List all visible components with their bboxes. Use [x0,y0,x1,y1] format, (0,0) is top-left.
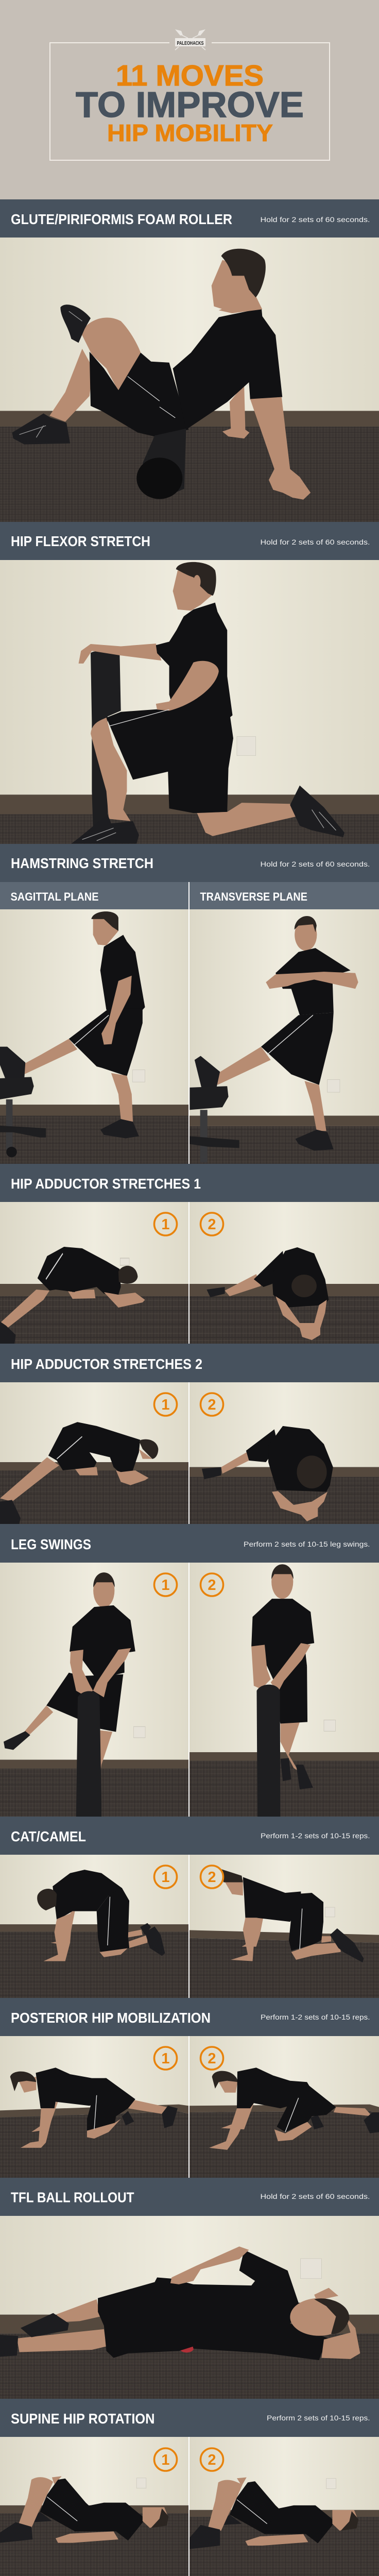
step badge 1 [154,2448,177,2471]
photo: side-lying ball rollout [0,2216,379,2399]
step badge 1 [154,1573,177,1596]
heading band [0,844,379,882]
title: TO IMPROVE [76,84,304,125]
title: HIP MOBILITY [107,120,273,146]
photo: mobilization step 2 [190,2036,379,2178]
step badge 1: 1 [161,2050,170,2067]
heading band: LEG SWINGS [11,1536,91,1552]
photo: transverse plane stretch [190,909,379,1164]
photo: adductor 2 step 1 [0,1382,188,1524]
photo: adductor 1 step 1 [0,1202,188,1344]
heading band: Hold for 2 sets of 60 seconds. [261,2192,370,2200]
panel: glute/piriformis foam roller [0,199,379,522]
step badge 2 [201,1393,223,1416]
panel: cat/camel [0,1817,379,1998]
title frame [50,43,330,160]
step badge 1: 1 [161,1869,170,1886]
step badge 2: 2 [208,1216,216,1233]
heading band [0,2399,379,2437]
heading band: GLUTE/PIRIFORMIS FOAM ROLLER [11,211,232,227]
step badge 1 [154,1213,177,1235]
heading band: HIP ADDUCTOR STRETCHES 2 [11,1356,202,1372]
step badge 2: 2 [208,1577,216,1594]
heading band: HIP FLEXOR STRETCH [11,533,150,549]
photo: camel pose [190,1855,379,1998]
photo: sagittal plane stretch [0,909,188,1164]
step badge 2 [201,2448,223,2471]
heading band: Perform 1-2 sets of 10-15 reps. [261,2013,370,2021]
heading band [0,522,379,560]
step badge 1 [154,1393,177,1416]
heading band: Perform 2 sets of 10-15 reps. [267,2414,370,2422]
step badge 2 [201,1573,223,1596]
photo: supine rotation step 1 [0,2437,188,2576]
panel: leg swings [0,1524,379,1817]
heading band: Hold for 2 sets of 60 seconds. [261,538,370,546]
title [76,59,304,146]
heading band: Perform 2 sets of 10-15 leg swings. [244,1540,370,1548]
heading band [0,199,379,238]
step badge 2: 2 [208,1869,216,1886]
step badge 2 [201,2047,223,2070]
icon: PaleoHacks logo [175,29,205,50]
panel: hamstring stretch [0,844,379,1164]
step badge 2: 2 [208,1397,216,1413]
panel: hip adductor stretches 1 [0,1164,379,1344]
heading band [0,1817,379,1855]
step badge 2 [201,1213,223,1235]
heading band: TFL BALL ROLLOUT [11,2190,134,2205]
heading band [0,2178,379,2216]
step badge 2 [201,1866,223,1888]
photo: adductor 2 step 2 [190,1382,379,1524]
panel: posterior hip mobilization [0,1998,379,2178]
step badge 1: 1 [161,1397,170,1413]
sub-heading: sagittal plane: SAGITTAL PLANE [10,890,99,903]
sub-heading: transverse plane: TRANSVERSE PLANE [200,890,307,903]
step badge 1: 1 [161,2452,170,2468]
heading band: Hold for 2 sets of 60 seconds. [261,215,370,224]
photo: mobilization step 1 [0,2036,188,2178]
heading band [0,1344,379,1382]
photo: leg swing step 1 [0,1563,188,1817]
step badge 1 [154,1866,177,1888]
panel: TFL ball rollout [0,2178,379,2399]
step badge 2: 2 [208,2050,216,2067]
panel: hip adductor stretches 2 [0,1344,379,1524]
heading band: CAT/CAMEL [11,1828,86,1844]
photo: cat pose [0,1855,188,1998]
heading band [0,1998,379,2036]
photo: leg swing step 2 [190,1563,379,1817]
sub-heading: sagittal plane [0,882,188,909]
step badge 1 [154,2047,177,2070]
heading band: HAMSTRING STRETCH [11,855,153,871]
icon: wall outlet [237,736,256,756]
header panel [0,0,379,199]
heading band: SUPINE HIP ROTATION [11,2411,154,2427]
step badge 2: 2 [208,2452,216,2468]
photo: foam roller pose [0,238,379,522]
panel: hip flexor stretch [0,522,379,844]
title: 11 MOVES [116,59,264,92]
heading band [0,1524,379,1563]
step badge 1: 1 [161,1216,170,1233]
sub-heading: transverse plane [190,882,379,909]
heading band: Hold for 2 sets of 60 seconds. [261,860,370,868]
photo: kneeling hip flexor stretch [0,560,379,844]
heading band: HIP ADDUCTOR STRETCHES 1 [11,1176,201,1192]
photo: supine rotation step 2 [190,2437,379,2576]
heading band: Perform 1-2 sets of 10-15 reps. [261,1832,370,1840]
heading band [0,1164,379,1202]
photo: adductor 1 step 2 [190,1202,379,1344]
heading band: POSTERIOR HIP MOBILIZATION [11,2010,211,2026]
icon: PaleoHacks logo: PALEOHACKS [177,41,204,46]
step badge 1: 1 [161,1577,170,1594]
panel: supine hip rotation [0,2399,379,2576]
